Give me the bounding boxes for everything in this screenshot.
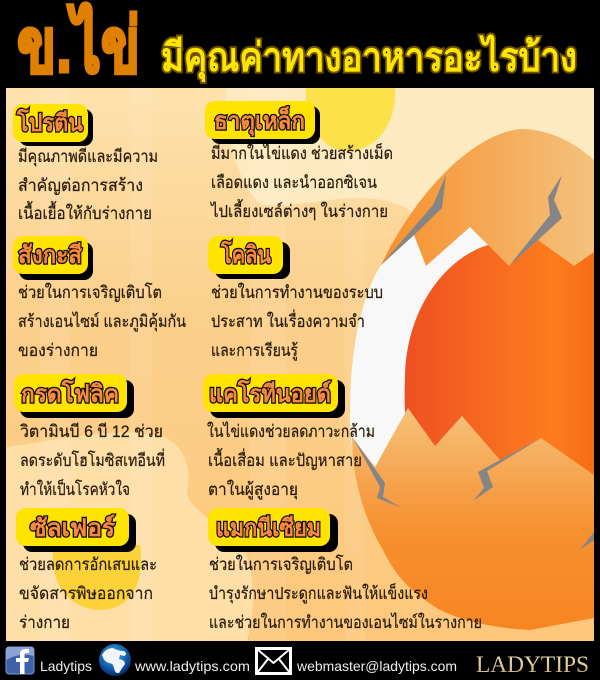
body text: บำรุงรักษาประดูกและฟันให้แข็งแรง <box>209 582 428 604</box>
top shell <box>381 129 594 266</box>
crack: top right <box>509 175 562 266</box>
egg yolk <box>404 240 594 475</box>
section: ซัลเฟอร์ <box>16 508 157 632</box>
body text: ช่วยในการเจริญเติบโต <box>18 282 162 302</box>
heading: ธาตุเหล็ก <box>214 106 305 137</box>
body text: เนื้อเยื้อให้กับร่างกาย <box>18 201 152 223</box>
badge <box>205 101 315 139</box>
body text: ร่างกาย <box>19 613 70 632</box>
icon: envelope <box>256 648 290 674</box>
title <box>17 2 577 89</box>
section: โปรตีน <box>13 104 158 223</box>
heading: สังกะสี <box>18 242 82 269</box>
body text: ทำให้เป็นโรคหัวใจ <box>20 478 130 499</box>
footer: website: www.ladytips.com <box>134 658 250 674</box>
body text: มีคุณภาพดีและมีความ <box>18 147 158 167</box>
heading: แมกนีเซียม <box>216 515 321 542</box>
body text: เนื้อเสื่อม และปัญหาสาย <box>208 448 362 470</box>
body text: ของร่างกาย <box>18 341 98 360</box>
body text: มีมากในไข่แดง ช่วยสร้างเม็ด <box>211 142 393 163</box>
body text: ช่วยในการทำงานของระบบ <box>211 282 383 302</box>
footer: email: webmaster@ladytips.com <box>296 658 457 674</box>
footer <box>6 644 589 677</box>
egg white <box>350 227 488 467</box>
badge shadow <box>19 242 93 280</box>
body text: ช่วยในการเจริญเติบโต <box>209 554 353 574</box>
crack: top left <box>381 175 446 265</box>
badge <box>16 508 129 546</box>
section: สังกะสี <box>13 236 186 360</box>
badge shadow <box>210 380 345 418</box>
body text: ช่วยลดการอักเสบและ <box>19 555 157 574</box>
badge <box>208 236 283 274</box>
body text: ประสาท ในเรื่องความจำ <box>211 309 365 331</box>
crack: bottom right <box>580 532 594 550</box>
body text: สำคัญต่อการสร้าง <box>18 176 143 195</box>
body text: และช่วยในการทำงานของเอนไซม์ในรางกาย <box>209 612 482 632</box>
icon: globe <box>99 644 131 676</box>
body text: และการเรียนรู้ <box>211 341 298 361</box>
badge <box>13 236 88 274</box>
section: ธาตุเหล็ก <box>205 101 393 221</box>
section: โคลิน <box>208 236 383 361</box>
badge <box>14 374 127 412</box>
badge shadow <box>20 380 134 418</box>
body text: ไปเลี้ยงเซล์ต่างๆ ในร่างกาย <box>209 199 388 221</box>
illustration: cracked egg <box>350 129 600 630</box>
crack: bottom middle <box>473 438 541 501</box>
heading: โคลิน <box>220 240 271 269</box>
badge shadow <box>19 109 93 146</box>
section: กรดโฟลิค <box>14 374 165 499</box>
heading: กรดโฟลิค <box>21 379 119 408</box>
badge shadow <box>215 242 290 279</box>
badge shadow <box>211 106 320 144</box>
body text: ในไข่แดงช่วยลดภาวะกล้าม <box>207 421 375 441</box>
body text: เลือดแดง และนำออกซิเจน <box>211 173 377 192</box>
icon: facebook <box>6 647 34 674</box>
body text: ขจัดสารพิษออกจาก <box>19 584 153 603</box>
body text: วิตามินบี 6 บี 12 ช่วย <box>20 422 163 441</box>
badge <box>208 508 330 546</box>
footer: ladytips: Ladytips <box>40 658 92 674</box>
crack: bottom left <box>353 438 402 508</box>
logo: ladytips: LADYTIPS <box>476 652 589 677</box>
section: แมกนีเซียม <box>208 508 482 632</box>
body text: ลดระดับโฮโมซิสเทอีนที่ <box>20 448 165 470</box>
badge shadow <box>23 514 136 552</box>
section: แคโรทีนอยด์ <box>203 374 375 500</box>
badge <box>13 104 88 142</box>
heading: แคโรทีนอยด์ <box>209 379 331 408</box>
bottom shell <box>352 408 594 630</box>
badge shadow <box>215 514 338 552</box>
title: main orange: ข.ไข่ <box>17 2 140 89</box>
body text: สร้างเอนไซม์ และภูมิคุ้มกัน <box>18 311 186 332</box>
heading: ซัลเฟอร์ <box>30 514 115 542</box>
heading: โปรตีน <box>16 108 84 137</box>
badge <box>203 374 338 412</box>
body text: ตาในผู้สูงอายุ <box>208 479 298 500</box>
